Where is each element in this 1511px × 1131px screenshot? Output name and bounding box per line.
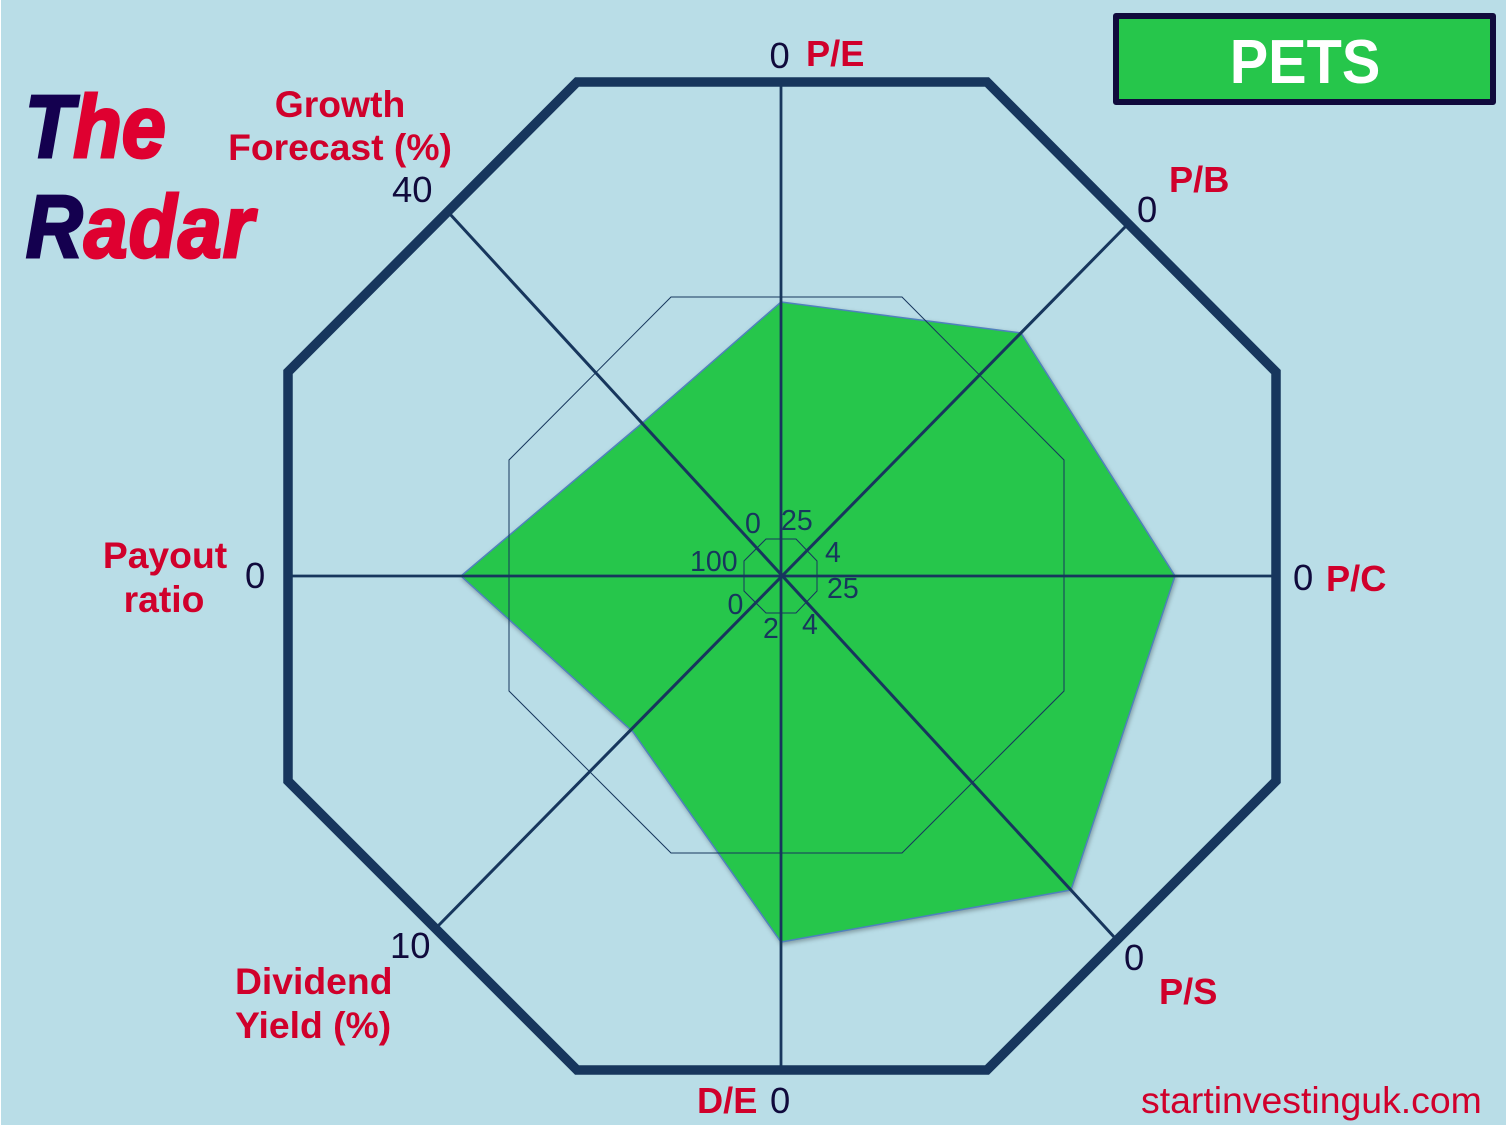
outer scale numbers: 0 (1124, 937, 1144, 978)
axis label: P/B: P/B (1169, 159, 1229, 200)
axis label: Growth Forecast (228, 83, 452, 168)
inner scale numbers (690, 505, 859, 645)
PETS badge (1116, 16, 1493, 102)
title: The Radar: The (25, 77, 166, 176)
axis label: Growth Forecast: Growth (275, 83, 405, 125)
outer scale numbers: 0 (245, 555, 265, 596)
axis label: Dividend Yield: Yield (%) (235, 1004, 391, 1046)
axis label: Growth Forecast: Forecast (%) (228, 126, 452, 168)
axis label: Dividend Yield: Dividend (235, 960, 392, 1002)
inner scale numbers: 4 (825, 537, 841, 569)
outer scale numbers: 0 (770, 35, 790, 76)
title: The Radar: Radar (26, 178, 258, 276)
outer scale numbers: 0 (1293, 557, 1313, 598)
axis label: P/E: P/E (806, 33, 864, 74)
axis label: D/E: D/E (697, 1080, 757, 1121)
outer scale numbers: 10 (390, 925, 430, 966)
inner scale numbers: 0 (728, 589, 743, 621)
axis label: Payout ratio: Payout (103, 534, 227, 576)
inner scale numbers: 0 (745, 508, 761, 540)
inner scale numbers: 2 (763, 613, 779, 645)
inner scale numbers: 25 (827, 573, 859, 605)
outer scale numbers: 40 (392, 169, 432, 210)
axis label: Payout ratio: ratio (124, 578, 204, 620)
radar spokes (288, 82, 1276, 1070)
axis label: Dividend Yield (235, 960, 392, 1046)
axis label: Payout ratio (103, 534, 227, 620)
PETS badge: PETS (1230, 27, 1380, 96)
middle reference octagon (509, 297, 1064, 853)
website credit: startinvestinguk.com (1141, 1079, 1482, 1121)
axis label: P/C: P/C (1326, 558, 1386, 599)
outer scale numbers: 0 (770, 1080, 790, 1121)
inner scale numbers: 100 (690, 546, 738, 578)
radar data polygon (461, 302, 1175, 942)
outer scale numbers: 0 (1137, 189, 1157, 230)
outer scale numbers (245, 35, 1313, 1121)
inner scale numbers: 25 (781, 505, 813, 537)
inner scale numbers: 4 (802, 609, 818, 641)
axis label: P/S: P/S (1159, 971, 1217, 1012)
title: The Radar (25, 77, 258, 276)
inner reference octagon (744, 539, 817, 613)
outer octagon (288, 82, 1276, 1070)
